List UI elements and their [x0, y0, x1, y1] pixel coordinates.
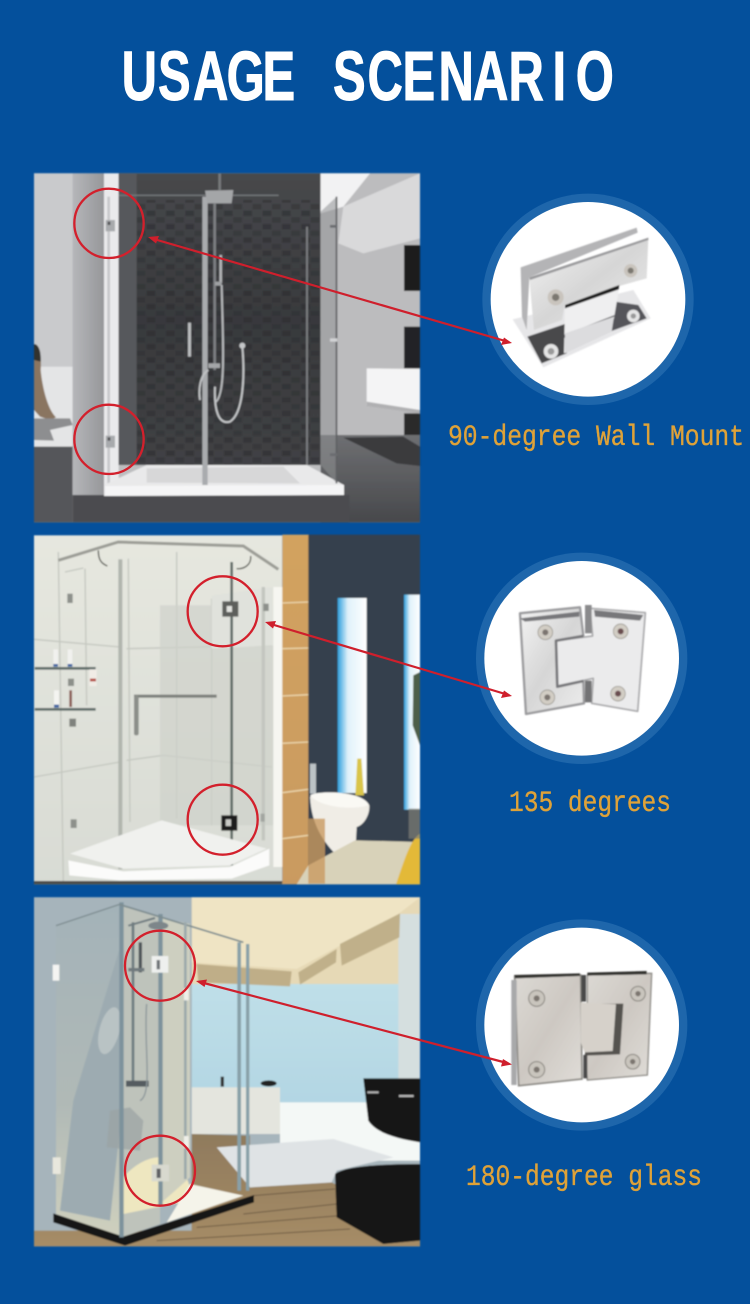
- side wall: [34, 897, 192, 1231]
- shower head: [218, 173, 221, 190]
- hinges: [152, 956, 168, 973]
- icon: 90-degree hinge: [513, 228, 651, 367]
- glass frames: [118, 559, 122, 869]
- arrow: 180-degree hinge to photo: [196, 980, 512, 1066]
- label: 180-degree glass: 180-degree glass: [466, 1161, 702, 1195]
- hinges in photo: [106, 220, 115, 231]
- product badge: 135-degree hinge: [476, 553, 687, 764]
- panel: 180 degree glass shower photo: [34, 897, 420, 1246]
- callout circle: lower hinge: [125, 1136, 195, 1206]
- glass frames: [119, 902, 124, 1237]
- floor: [73, 495, 349, 522]
- black ottoman and vanity: [335, 1164, 420, 1244]
- wood floor: [34, 1134, 420, 1246]
- panel: 90-degree wall mount shower photo: [34, 173, 420, 522]
- product badge: 180-degree hinge: [476, 919, 687, 1131]
- icon: 180-degree hinge: [511, 971, 652, 1086]
- label: 90-degree wall mount: 90-degree Wall Mount: [448, 421, 744, 455]
- tub and room: [192, 1087, 280, 1134]
- icon: 135-degree hinge: [520, 605, 645, 714]
- title: USAGE SCENARIO: [122, 36, 614, 115]
- label: 135 degrees: 135 degrees: [509, 787, 671, 821]
- arrow: 90-degree hinge to photo: [148, 236, 512, 345]
- towel bar: [134, 695, 217, 698]
- callout circle: lower hinge: [188, 785, 258, 855]
- arrow: 135-degree hinge to photo: [265, 621, 512, 698]
- orange tile column: [282, 535, 309, 884]
- small hinges: [67, 594, 73, 603]
- callout circle: upper hinge: [125, 931, 195, 1001]
- panel: 135 degree shower photo: [34, 535, 420, 884]
- tray: [70, 820, 267, 869]
- toilet: [310, 764, 316, 794]
- right room: [321, 173, 420, 437]
- callout circle: upper hinge: [74, 189, 144, 258]
- callout circle: lower hinge: [74, 405, 144, 474]
- floor: [297, 840, 420, 884]
- hinges in photo: [222, 601, 238, 617]
- rug: [217, 1139, 393, 1187]
- bottle: [355, 759, 364, 795]
- roller blinds: [340, 913, 400, 966]
- tray and black base: [167, 1184, 243, 1222]
- shelves: [35, 667, 96, 670]
- dark wall: [308, 535, 420, 868]
- product badge: 90-degree hinge: [482, 194, 694, 405]
- yellow towel: [396, 834, 420, 884]
- top rail: [58, 542, 278, 569]
- tray: [104, 465, 344, 496]
- front glass frame: [202, 197, 208, 485]
- glass side panel: [321, 197, 337, 483]
- shower fittings: [132, 922, 134, 1086]
- callout circle: upper hinge: [188, 576, 258, 646]
